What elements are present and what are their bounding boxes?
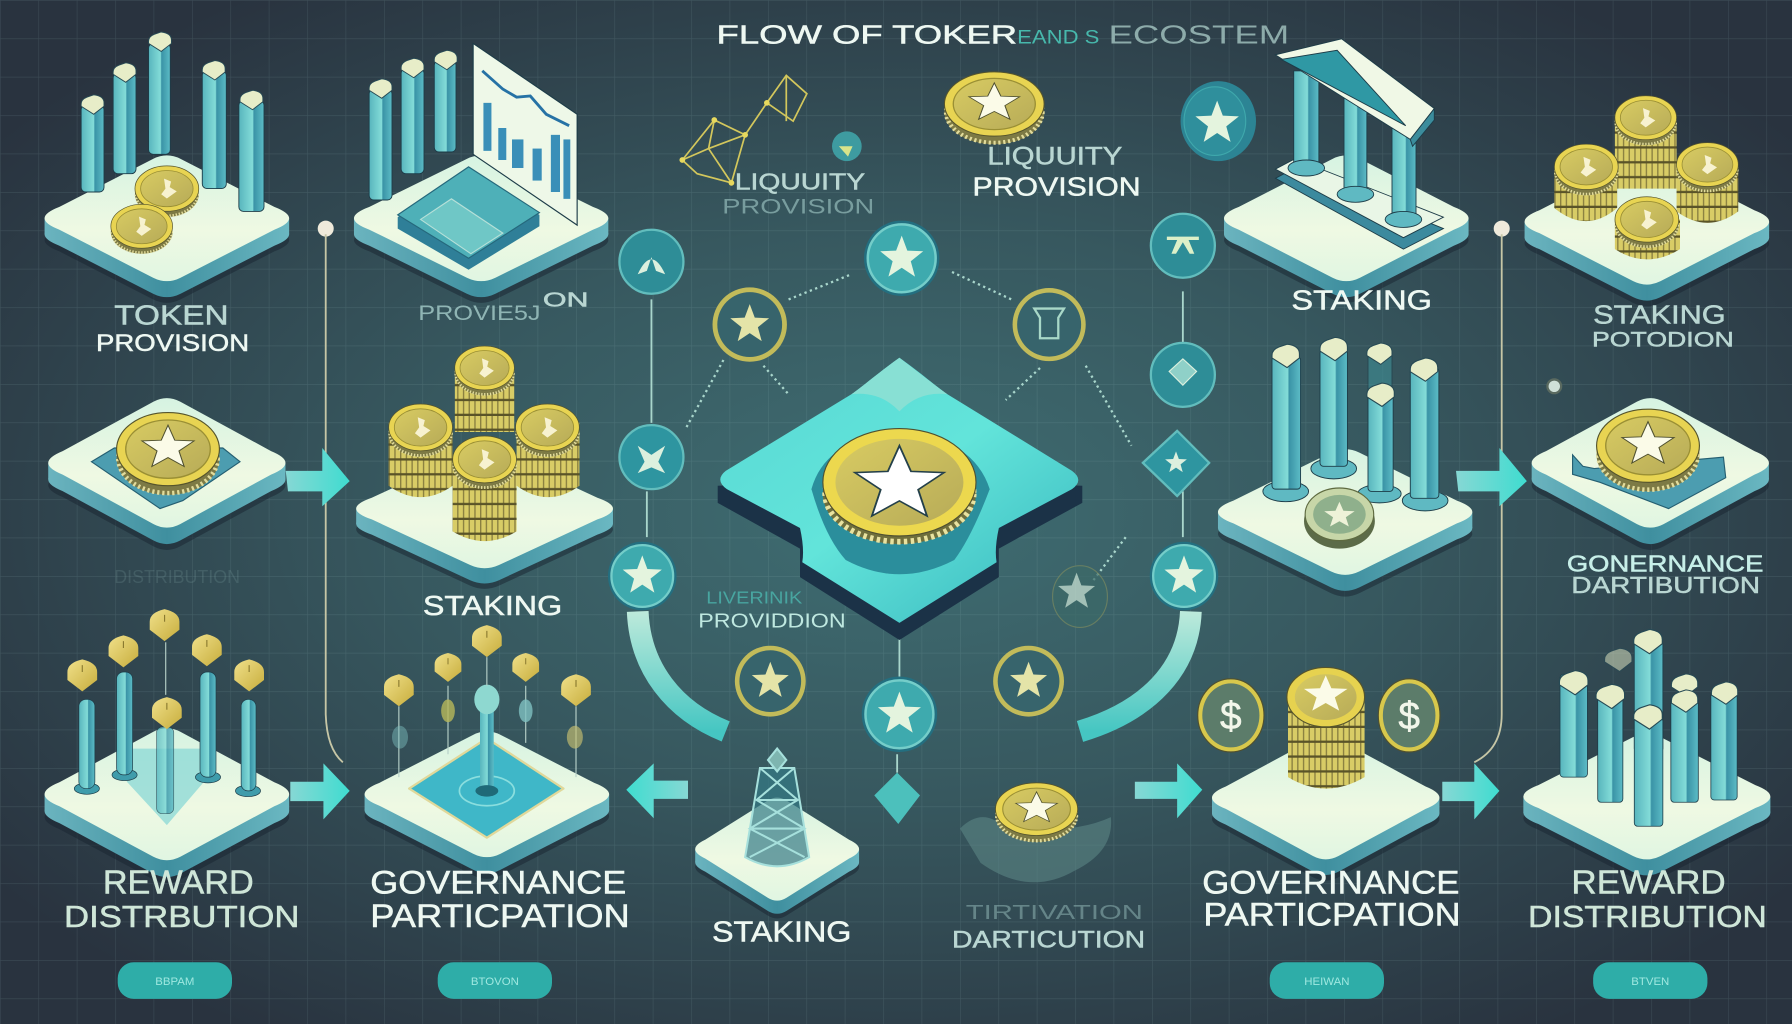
label xyxy=(370,865,630,934)
nodes: left column xyxy=(608,230,683,610)
panel: reward distribution right xyxy=(1523,629,1770,934)
gold pins xyxy=(67,609,264,729)
chart screen xyxy=(473,43,577,225)
label: PROVISION xyxy=(973,171,1141,201)
top coin with label xyxy=(944,72,1141,201)
arrow: row 3 right xyxy=(1442,763,1499,819)
title: EAND S xyxy=(1017,26,1099,48)
label: DISTRBUTION xyxy=(64,899,299,934)
label: PARTICPATION xyxy=(370,898,630,934)
dollar coins: $ xyxy=(1398,695,1420,738)
bank icon xyxy=(1275,39,1443,249)
platform xyxy=(45,155,289,303)
label: REWARD xyxy=(1571,865,1726,902)
platform xyxy=(356,449,613,589)
coins xyxy=(111,166,199,254)
label: PARTICPATION xyxy=(1203,897,1461,933)
panel: provision chart xyxy=(354,43,608,325)
panel: governance coin stack xyxy=(1198,667,1461,933)
hub top xyxy=(720,358,1078,623)
title xyxy=(717,19,1289,49)
platform xyxy=(1532,398,1769,550)
label xyxy=(96,300,249,357)
pill button 4: BTVEN xyxy=(1631,976,1669,988)
bars xyxy=(369,50,457,200)
label: POTODION xyxy=(1592,326,1734,351)
node: top star xyxy=(864,221,939,296)
node: gold star left xyxy=(713,287,787,362)
platform xyxy=(48,398,285,550)
label: GONERNANCE xyxy=(1567,550,1763,576)
title: ECOSTEM xyxy=(1109,19,1289,49)
panel: reward distribution left xyxy=(45,609,299,934)
label: STAKING xyxy=(1593,299,1726,329)
small token xyxy=(1547,379,1561,393)
label: STAKING xyxy=(712,917,851,949)
water xyxy=(127,749,208,825)
panel: top staking bank xyxy=(1224,39,1469,316)
pill button 1 xyxy=(118,962,232,999)
coin with faint ribbon xyxy=(960,783,1111,882)
node: gold star lower right xyxy=(993,646,1064,717)
pill button 2: BTOVON xyxy=(471,976,519,988)
ripples xyxy=(459,776,514,806)
gold pins xyxy=(384,625,591,777)
platform xyxy=(1212,736,1439,881)
coin stacks xyxy=(1554,96,1738,259)
pill button 3 xyxy=(1270,962,1384,999)
curved band: right xyxy=(1080,611,1191,731)
label: PROVIE5J xyxy=(418,300,541,325)
ribbon xyxy=(91,448,240,509)
label xyxy=(418,288,589,325)
nodes: right column xyxy=(1143,214,1218,610)
panel: token provision xyxy=(45,32,289,357)
arrow: row 2 right xyxy=(1456,448,1527,506)
label: LIQUUITY xyxy=(987,143,1123,171)
ribbon xyxy=(960,817,1111,882)
label: liver provision xyxy=(698,587,846,632)
label: ON xyxy=(543,288,589,311)
pool xyxy=(409,738,563,838)
pillars xyxy=(1263,337,1448,511)
kite icon xyxy=(874,773,920,824)
hub bump xyxy=(851,358,947,411)
label xyxy=(1528,865,1767,934)
connector line: left xyxy=(318,221,343,762)
label: participation: DARTICUTION xyxy=(952,926,1145,953)
top-right teal star token xyxy=(1181,81,1256,161)
node: bottom star xyxy=(862,677,937,752)
bars xyxy=(81,32,264,211)
panel: star coin left xyxy=(48,398,285,550)
label xyxy=(64,865,299,934)
arrow: row 3 reverse xyxy=(626,763,688,818)
label xyxy=(973,143,1141,201)
arrow: row 3 centre right xyxy=(1135,763,1202,818)
faint star token xyxy=(1053,566,1107,627)
platform xyxy=(354,155,608,303)
star coin xyxy=(1597,409,1699,491)
label: GOVERINANCE xyxy=(1202,865,1459,901)
label xyxy=(1567,550,1763,598)
platform xyxy=(1523,734,1770,881)
label: REWARD xyxy=(103,865,254,902)
title: FLOW OF TOKER xyxy=(717,19,1017,49)
tablet xyxy=(398,167,539,270)
coin xyxy=(944,72,1044,144)
arrow: row 3 left xyxy=(290,763,350,819)
hub recess xyxy=(811,430,990,574)
panel: pillars with coin xyxy=(1218,337,1472,597)
panel: governance distribution xyxy=(1532,379,1769,598)
ribbon xyxy=(1573,455,1726,509)
main coin xyxy=(823,429,976,544)
label: left liquidity: PROVISION xyxy=(722,194,874,219)
pipe xyxy=(474,685,499,797)
panel: tower staking xyxy=(695,749,859,949)
label: TOKEN xyxy=(114,300,229,331)
pill button 3: HEIWAN xyxy=(1304,976,1349,988)
label: participation xyxy=(952,901,1145,953)
network icon xyxy=(679,75,807,186)
coin xyxy=(1304,488,1375,549)
label: liver provision: PROVIDDION xyxy=(698,609,846,632)
label: liver provision: LIVERINIK xyxy=(706,587,803,607)
small orb xyxy=(832,131,862,161)
panel: staking coin stacks xyxy=(356,346,613,621)
platform xyxy=(1218,449,1472,597)
label xyxy=(1202,865,1461,933)
central hub xyxy=(718,358,1082,640)
arrow: row 2 left xyxy=(286,448,350,506)
platform xyxy=(695,798,859,918)
dollar coins xyxy=(1198,679,1440,752)
node: gold star lower left xyxy=(735,646,806,717)
label: STAKING xyxy=(423,590,562,621)
connector line: right xyxy=(1474,221,1510,762)
node: gold building right xyxy=(1013,288,1086,361)
label: left liquidity: LIQUUITY xyxy=(735,169,865,195)
label: PROVISION xyxy=(96,330,249,357)
bars xyxy=(74,672,261,814)
label: GOVERNANCE xyxy=(370,865,626,901)
label: DARTIBUTION xyxy=(1571,572,1760,598)
dollar coins: $ xyxy=(1220,695,1242,738)
curved band: left xyxy=(638,611,726,731)
pill button 1: BBPAM xyxy=(155,976,194,988)
tower xyxy=(745,749,809,866)
panel: staking position xyxy=(1525,96,1769,351)
platform xyxy=(1224,155,1469,303)
panel: governance pool xyxy=(365,625,630,934)
coin xyxy=(995,783,1078,842)
platform xyxy=(45,728,289,883)
label: left liquidity xyxy=(722,169,874,219)
coin stacks xyxy=(389,346,579,541)
label: DISTRIBUTION xyxy=(1528,899,1767,934)
label: participation: TIRTIVATION xyxy=(966,901,1143,924)
platform xyxy=(1525,159,1769,306)
platform xyxy=(365,731,609,879)
hub base xyxy=(718,480,1082,640)
label: STAKING xyxy=(1291,285,1432,316)
pill button 2 xyxy=(438,962,552,999)
faded text: DISTRIBUTION xyxy=(114,566,240,587)
star coin xyxy=(117,413,219,495)
connectors around hub xyxy=(647,272,1183,773)
coin stack xyxy=(1287,667,1365,789)
pillars xyxy=(1559,629,1738,826)
pill button 4 xyxy=(1593,962,1707,999)
label xyxy=(1592,299,1734,351)
